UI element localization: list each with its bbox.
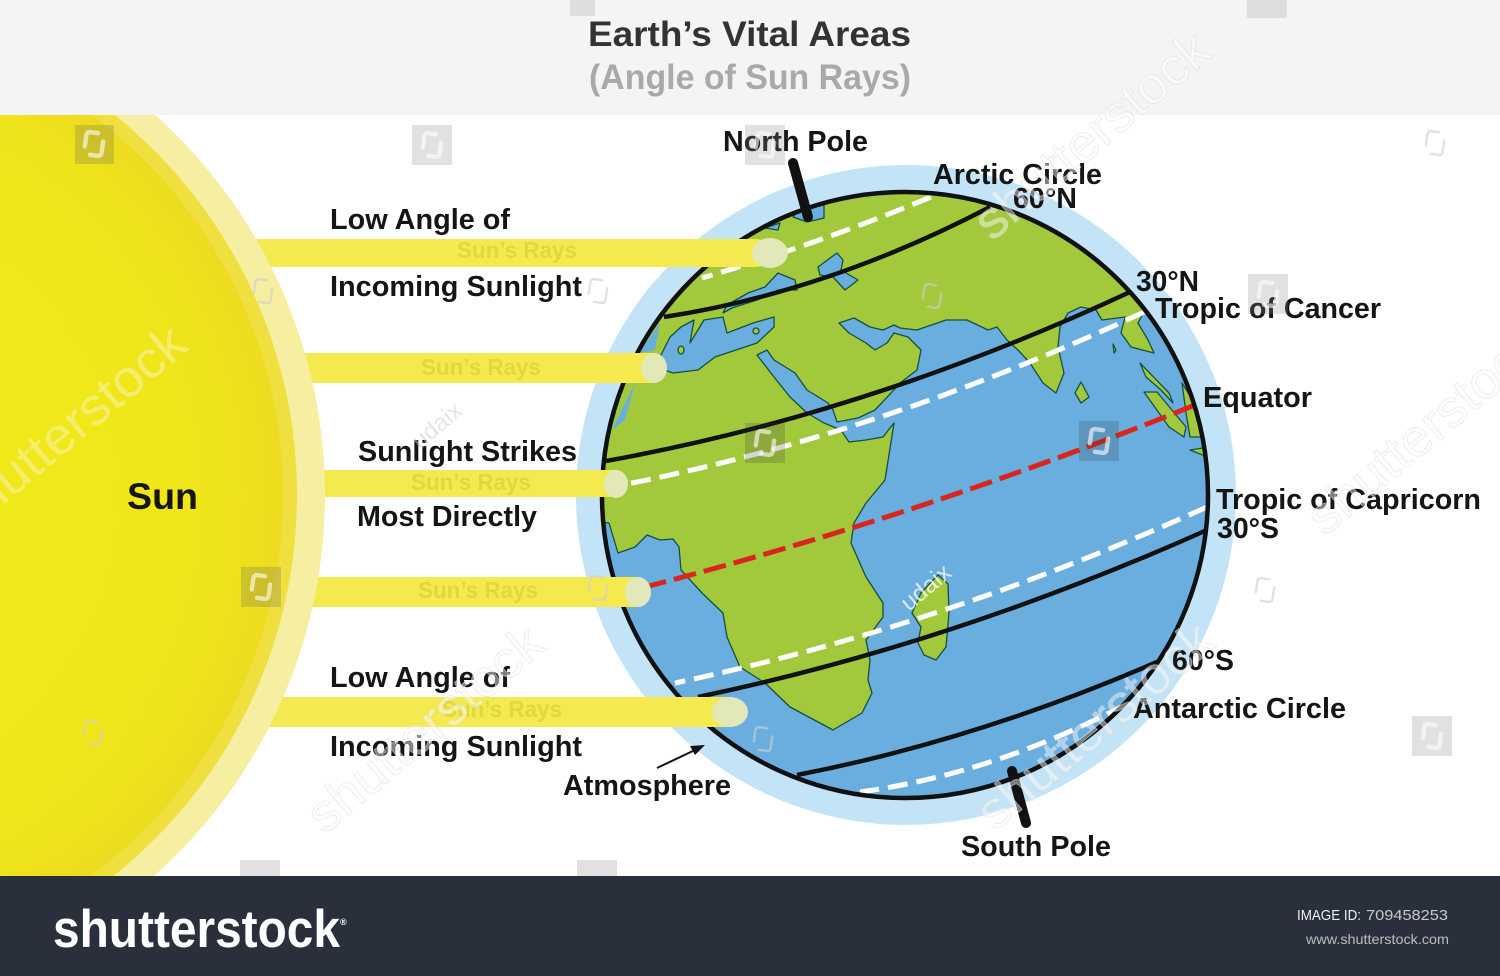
labels: globe: Tropic of Capricorn bbox=[1216, 484, 1481, 516]
header band bbox=[0, 0, 1500, 115]
labels: left: Most Directly bbox=[357, 501, 537, 533]
ray 2 bbox=[290, 353, 667, 383]
labels: globe: 60°N bbox=[1013, 183, 1077, 215]
equator red dashed bbox=[645, 405, 1195, 587]
latitude lines bbox=[606, 197, 1207, 792]
labels: left: Incoming Sunlight bbox=[330, 271, 583, 303]
labels: globe: Tropic of Cancer bbox=[1155, 293, 1381, 325]
Tropic of Capricorn white dashed bbox=[675, 507, 1207, 683]
seas bbox=[656, 317, 774, 373]
labels: globe: 30°S bbox=[1217, 513, 1279, 545]
watermarks: shutterstock bbox=[962, 20, 1223, 251]
sun's rays bbox=[240, 237, 788, 727]
sun label: Sun bbox=[127, 476, 198, 517]
ray 1 bbox=[240, 237, 788, 268]
shutterstock logo: shutterstock bbox=[53, 900, 340, 959]
watermarks: shutterstock bbox=[965, 610, 1226, 841]
labels: globe: South Pole bbox=[961, 831, 1111, 863]
labels: left: Low Angle of bbox=[330, 204, 511, 236]
north pole axis bbox=[793, 163, 808, 217]
labels: globe: Antarctic Circle bbox=[1133, 693, 1346, 725]
south pole axis bbox=[1012, 771, 1026, 823]
labels: left: Incoming Sunlight bbox=[330, 731, 583, 763]
ray 5 bbox=[255, 696, 748, 727]
subtitle: (Angle of Sun Rays) bbox=[589, 58, 911, 97]
watermarks: udaix bbox=[407, 397, 468, 455]
ray 5: Sun’s Rays bbox=[442, 696, 562, 722]
sun bbox=[0, 115, 325, 876]
labels: globe: 60°S bbox=[1172, 645, 1234, 677]
image id bbox=[1297, 907, 1448, 924]
ray 4: Sun’s Rays bbox=[418, 577, 538, 603]
islands bbox=[1075, 382, 1089, 403]
labels: left bbox=[330, 204, 583, 763]
atmosphere bbox=[576, 165, 1236, 825]
ray 4 bbox=[300, 577, 651, 607]
Antarctic circle white dashed bbox=[860, 705, 1125, 792]
30S line bbox=[698, 530, 1207, 697]
filled watermark glyphs bbox=[84, 132, 1442, 748]
labels: globe: Atmosphere bbox=[563, 770, 731, 802]
ray 3 bbox=[310, 469, 628, 498]
labels: globe: North Pole bbox=[723, 126, 868, 158]
labels: globe: 30°N bbox=[1136, 266, 1199, 298]
website: www.shutterstock.com bbox=[1305, 931, 1449, 947]
labels: left: Low Angle of bbox=[330, 662, 511, 694]
footer bar bbox=[0, 876, 1500, 976]
outline watermark glyphs bbox=[83, 131, 1445, 751]
ray 2: Sun’s Rays bbox=[421, 354, 541, 380]
globe outline bbox=[602, 192, 1208, 798]
labels: left: Sunlight Strikes bbox=[358, 436, 577, 468]
Tropic of Cancer white dashed bbox=[617, 312, 1144, 486]
Arctic circle white dashed bbox=[702, 197, 931, 278]
60N line bbox=[664, 207, 990, 317]
globe bbox=[570, 130, 1240, 825]
labels: globe: Equator bbox=[1203, 382, 1312, 414]
image id: IMAGE ID: bbox=[1297, 907, 1361, 924]
text: ® bbox=[340, 917, 347, 927]
labels: globe: Arctic Circle bbox=[933, 159, 1102, 191]
labels: globe bbox=[563, 126, 1481, 863]
ocean bbox=[602, 192, 1208, 798]
watermarks: shutterstock bbox=[295, 613, 556, 844]
watermarks: udaix bbox=[896, 559, 957, 617]
30N line bbox=[606, 292, 1130, 461]
60S line bbox=[797, 662, 1157, 775]
image id: 709458253 bbox=[1366, 907, 1448, 924]
continents bbox=[604, 194, 1204, 731]
ray 3: Sun’s Rays bbox=[411, 469, 531, 495]
arrow: atmosphere bbox=[657, 745, 705, 768]
title: Earth’s Vital Areas bbox=[588, 15, 911, 54]
ray 1: Sun’s Rays bbox=[457, 237, 577, 263]
